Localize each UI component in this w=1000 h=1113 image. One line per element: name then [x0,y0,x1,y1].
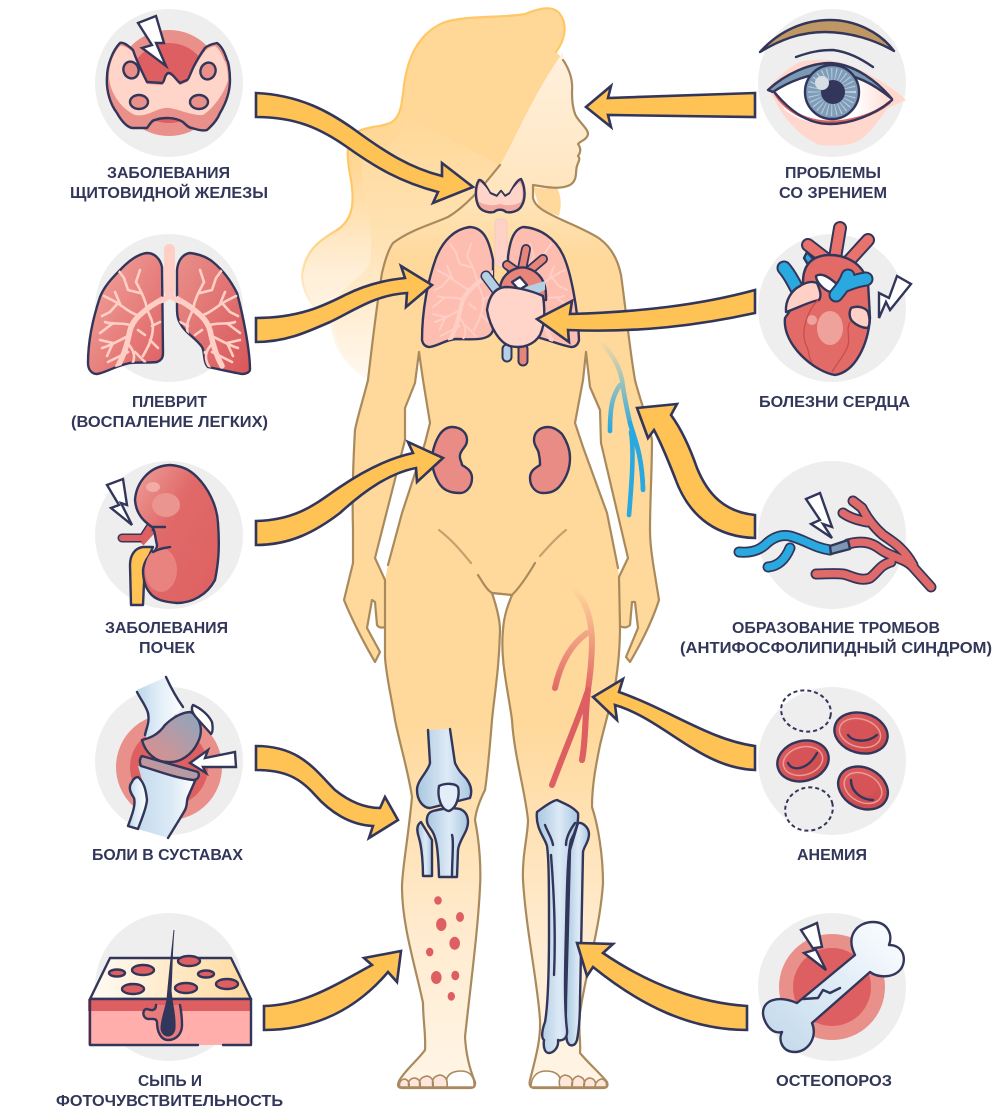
hair [302,8,566,378]
background circles [95,9,906,1061]
label: kidneys [105,620,228,657]
label: vision: СО ЗРЕНИЕМ [779,185,887,202]
label: anemia: АНЕМИЯ [797,847,867,864]
label: kidneys: ЗАБОЛЕВАНИЯ [105,620,228,637]
label: vision: ПРОБЛЕМЫ [785,165,881,182]
arrow: joints [256,746,398,838]
leg bones [537,800,589,1053]
label: pleurisy [71,394,268,431]
label: pleurisy: (ВОСПАЛЕНИЕ ЛЕГКИХ) [71,414,268,431]
artery in thigh [552,588,592,785]
label: blood clots: (АНТИФОСФОЛИПИДНЫЙ СИНДРОМ) [680,638,992,657]
organ: heart [486,249,546,361]
rash spots [426,896,464,1001]
label: skin [56,1073,283,1110]
organ: lungs [422,227,579,347]
organ: kidneys [432,427,570,493]
arrow: blood clots [637,404,755,538]
organ: thyroid [476,179,525,212]
label: thyroid: ЩИТОВИДНОЙ ЖЕЛЕЗЫ [70,183,268,202]
arrow: kidneys [256,442,443,545]
icon: lungs [88,244,250,374]
label: joints: БОЛИ В СУСТАВАХ [92,847,243,864]
arrow: eye [586,86,755,127]
arrow: skin [264,951,401,1030]
label: skin: СЫПЬ И [138,1073,202,1090]
toes [399,1071,607,1087]
arrow: osteoporosis [577,943,747,1030]
arrow: thyroid [256,93,473,203]
icon: joint [116,677,236,838]
vein in arm [602,342,643,515]
label: heart: БОЛЕЗНИ СЕРДЦА [759,394,910,411]
label: kidneys: ПОЧЕК [139,640,195,657]
icon: eye [760,20,906,146]
organ: trachea [495,219,507,267]
label: blood clots: ОБРАЗОВАНИЕ ТРОМБОВ [732,620,940,637]
icon: kidney [107,465,219,605]
arrow: anemia [593,679,755,770]
icon: thyroid [107,16,230,136]
icon: heart [784,228,911,375]
body silhouette [344,52,659,1088]
label: blood clots [680,620,992,657]
arrow: heart [537,290,755,342]
icon: blood clot [739,493,931,587]
knee bones [417,729,471,877]
icon: osteoporosis [763,922,904,1052]
arrow: lungs [256,266,432,342]
label: thyroid: ЗАБОЛЕВАНИЯ [107,165,230,182]
label: vision [779,165,887,202]
icon: skin [88,930,251,1045]
label: skin: ФОТОЧУВСТВИТЕЛЬНОСТЬ [56,1093,283,1110]
label: osteoporosis: ОСТЕОПОРОЗ [776,1073,892,1090]
label: pleurisy: ПЛЕВРИТ [132,394,207,411]
icon: anemia [773,686,895,836]
label: thyroid [70,165,268,202]
